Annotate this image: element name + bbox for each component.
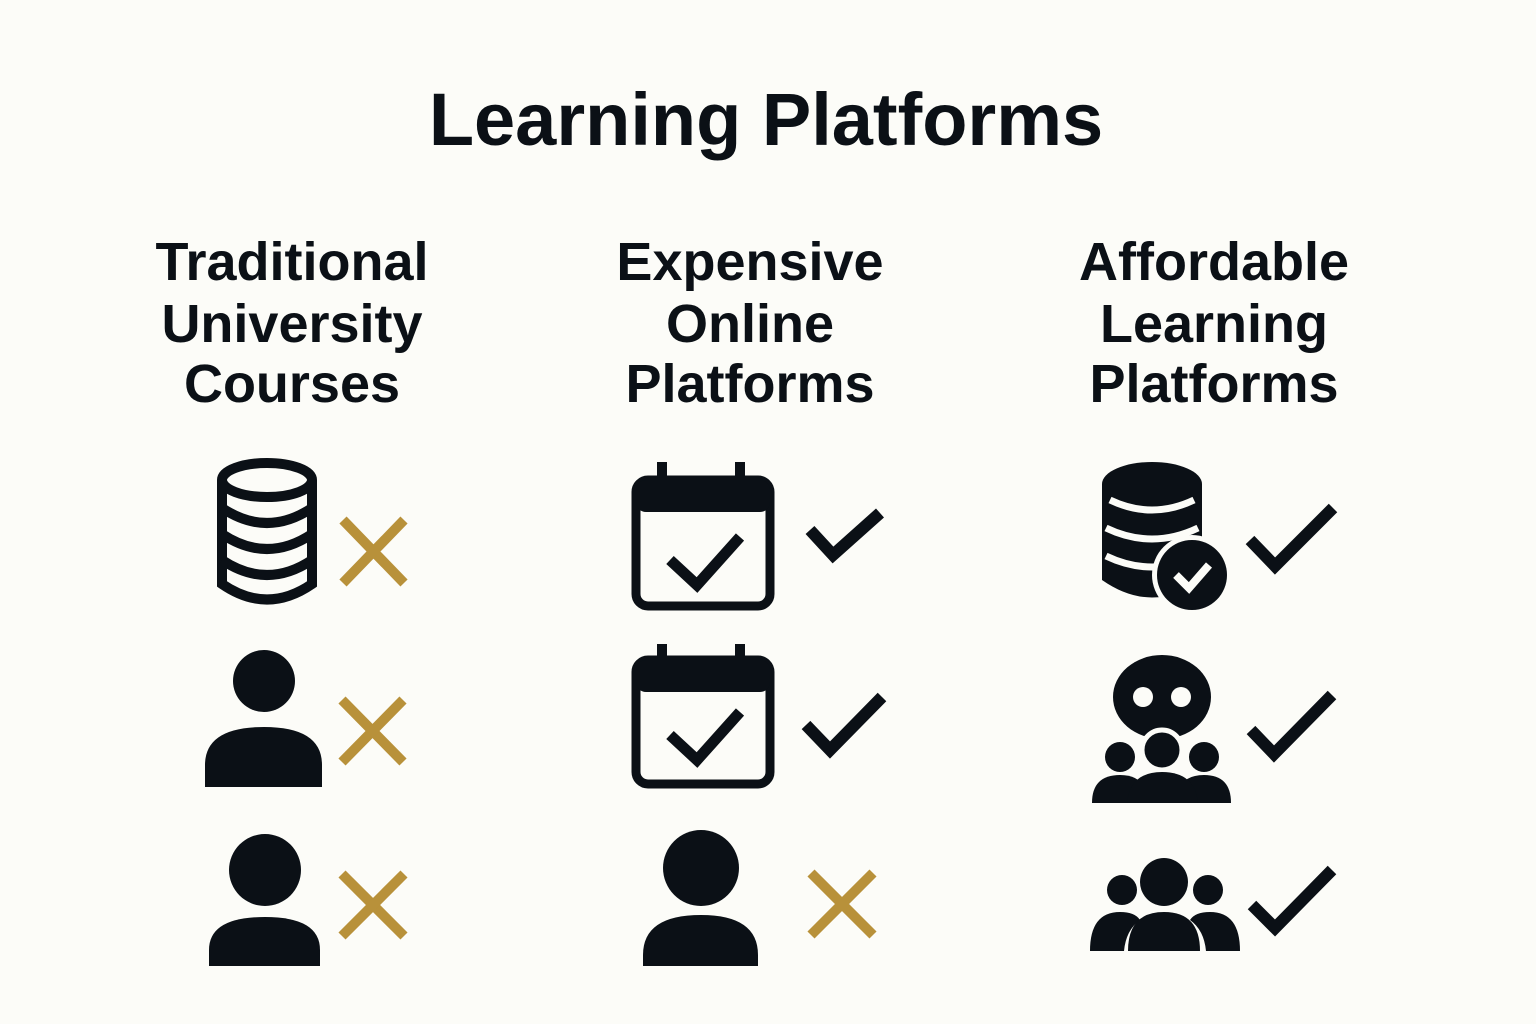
check xyxy=(1250,508,1333,566)
check xyxy=(1251,695,1332,754)
cross 2 xyxy=(342,700,403,762)
cross 1 xyxy=(343,520,404,583)
heading: traditional: Courses xyxy=(184,354,400,414)
icon: group xyxy=(1090,858,1240,951)
heading: affordable: Platforms xyxy=(1089,354,1339,414)
icon: person xyxy=(205,650,322,787)
heading: affordable: Learning xyxy=(1100,294,1328,354)
heading: traditional: University xyxy=(161,294,423,354)
cross 3 xyxy=(342,874,404,936)
heading: expensive xyxy=(616,232,884,414)
title: Learning Platforms xyxy=(429,78,1103,161)
icon: person xyxy=(209,834,320,966)
heading: expensive: Platforms xyxy=(625,354,875,414)
heading: affordable xyxy=(1079,232,1349,414)
icon: person xyxy=(643,830,758,966)
check xyxy=(1252,870,1332,928)
check xyxy=(810,513,880,555)
check xyxy=(806,697,882,750)
icon: coins with badge xyxy=(1102,462,1232,615)
cross xyxy=(811,873,873,935)
icon: calendar xyxy=(636,644,770,784)
heading: traditional xyxy=(155,232,429,414)
heading: expensive: Expensive xyxy=(616,232,884,292)
heading: traditional: Traditional xyxy=(155,232,429,292)
icon: database xyxy=(222,463,312,600)
heading: affordable: Affordable xyxy=(1079,232,1349,292)
icon: community xyxy=(1092,655,1231,803)
heading: expensive: Online xyxy=(666,294,834,354)
icon: calendar xyxy=(636,462,770,606)
